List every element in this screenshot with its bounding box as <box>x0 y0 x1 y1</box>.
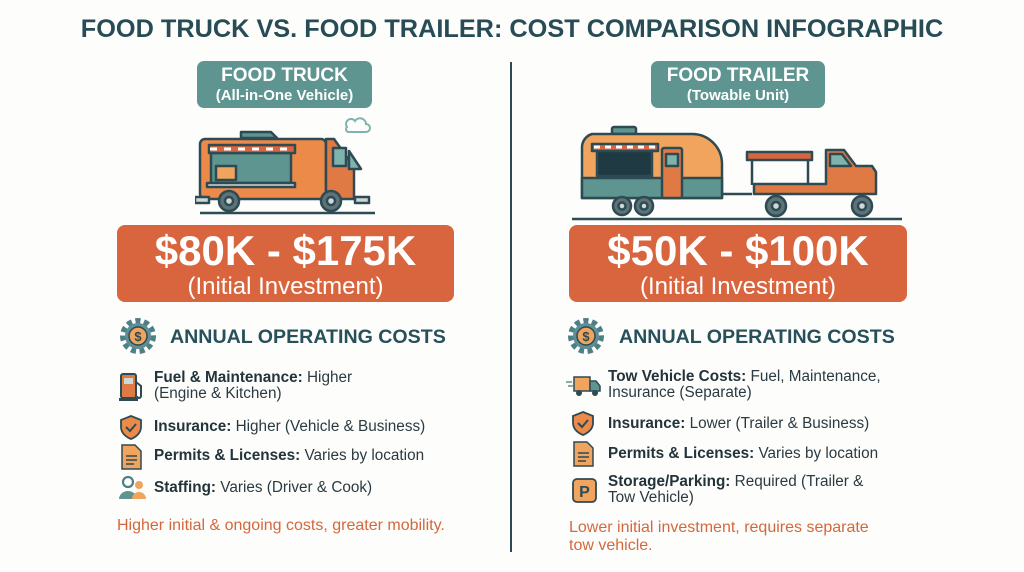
item: storage parking: Storage/Parking: Required (Trailer & <box>608 473 863 490</box>
title: FOOD TRUCK VS. FOOD TRAILER: COST COMPARISON INFOGRAPHIC <box>81 15 943 43</box>
icon: document <box>121 444 142 470</box>
item: permits <box>573 441 878 467</box>
footer note: food trailer: Lower initial investment, requires separate <box>569 519 869 536</box>
item: insurance: Insurance: Lower (Trailer & Business) <box>608 415 869 432</box>
footer note: food truck: Higher initial & ongoing costs, greater mobility. <box>117 517 445 534</box>
heading: annual operating costs: ANNUAL OPERATING COSTS <box>170 326 446 348</box>
divider line <box>510 62 512 552</box>
icon: shield <box>120 415 142 440</box>
price box: food truck: (Initial Investment) <box>187 273 384 300</box>
icon: gear dollar <box>120 318 156 354</box>
label: food truck: FOOD TRUCK <box>221 65 348 86</box>
icon: trailer and pickup <box>572 126 902 220</box>
item: storage parking: Tow Vehicle) <box>608 489 694 506</box>
item: insurance: Insurance: Higher (Vehicle & Business) <box>154 418 425 435</box>
item: fuel: (Engine & Kitchen) <box>154 385 282 402</box>
item: staffing: Staffing: Varies (Driver & Cook) <box>154 479 372 496</box>
item: insurance <box>120 415 425 440</box>
label: food truck <box>197 61 372 108</box>
item: tow vehicle costs: Tow Vehicle Costs: Fuel, Maintenance, <box>608 368 881 385</box>
heading: annual operating costs <box>120 318 446 354</box>
item: fuel: Fuel & Maintenance: Higher <box>154 369 352 386</box>
label: food trailer: FOOD TRAILER <box>667 65 809 86</box>
item: tow vehicle costs: Insurance (Separate) <box>608 384 752 401</box>
item: fuel <box>119 369 352 402</box>
icon: people <box>119 476 146 499</box>
heading: annual operating costs: ANNUAL OPERATING COSTS <box>619 326 895 348</box>
price box: food truck <box>117 225 454 302</box>
icon: parking: P <box>579 484 590 501</box>
icon: gear dollar: $ <box>582 329 590 344</box>
footer note: food trailer <box>569 519 869 554</box>
panel: food truck <box>117 61 454 534</box>
icon: document <box>573 441 594 467</box>
item: permits <box>121 444 424 470</box>
item: tow vehicle costs <box>566 368 881 401</box>
icon: shield <box>572 411 594 436</box>
label: food trailer <box>651 61 825 108</box>
item: storage parking <box>572 473 864 506</box>
item: insurance <box>572 411 869 436</box>
label: food trailer: (Towable Unit) <box>687 87 789 104</box>
heading: annual operating costs <box>568 318 895 354</box>
panel: food trailer <box>566 61 907 554</box>
icon: gear dollar <box>568 318 604 354</box>
price box: food trailer: (Initial Investment) <box>640 273 836 300</box>
icon: gear dollar: $ <box>134 329 142 344</box>
item: staffing <box>119 476 372 499</box>
price box: food trailer <box>569 225 907 302</box>
item: permits: Permits & Licenses: Varies by location <box>154 447 424 464</box>
icon: food truck <box>195 117 375 214</box>
footer note: food trailer: tow vehicle. <box>569 537 653 554</box>
price box: food truck: $80K - $175K <box>155 227 416 274</box>
label: food truck: (All-in-One Vehicle) <box>216 87 353 104</box>
price box: food trailer: $50K - $100K <box>607 227 869 274</box>
item: permits: Permits & Licenses: Varies by location <box>608 445 878 462</box>
icon: delivery truck <box>566 376 601 396</box>
icon: fuel pump <box>119 373 142 401</box>
icon: parking <box>572 478 597 503</box>
